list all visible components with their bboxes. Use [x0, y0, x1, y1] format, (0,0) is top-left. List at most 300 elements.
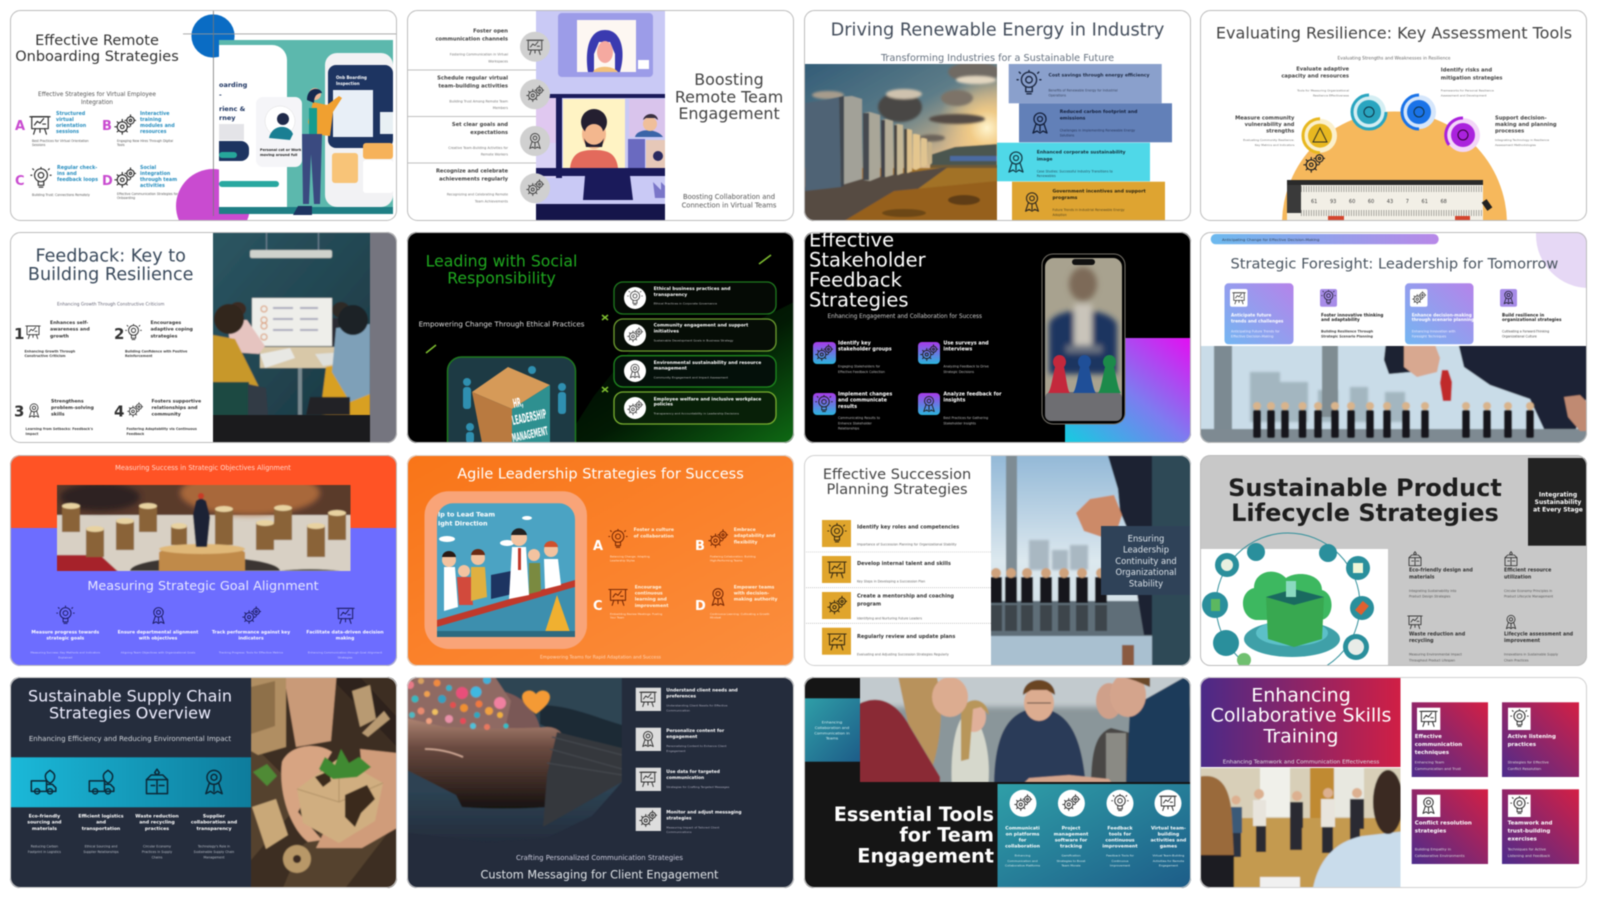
lifecycle captions: Integrating Sustainability into: [1409, 589, 1456, 593]
stakeholder headings: results: [838, 404, 857, 410]
succession captions: Evaluating and Adjusting Succession Strategies Regularly: [857, 653, 949, 657]
assessment headings: Evaluate adaptive: [1296, 67, 1349, 73]
strategy captions: Effective Communication Strategies for: [117, 192, 179, 196]
feedback captions: Learning from Setbacks: Feedback's: [26, 427, 93, 431]
feedback headings: Strengthens: [51, 398, 84, 404]
lifecycle captions: Innovations in Sustainable Supply: [1504, 653, 1558, 657]
lifecycle headings: improvement: [1504, 638, 1541, 644]
card: listening practices: practices: [1508, 742, 1537, 748]
supply chain headings: Waste reduction: [135, 814, 179, 820]
engagement headings: Schedule regular virtual: [437, 75, 508, 81]
feedback headings: Enhances self-: [50, 320, 88, 326]
step: government incentives: Adoption: [1052, 213, 1067, 217]
assessment captions: Key Metrics and Indicators: [1255, 143, 1295, 147]
subtitle: social responsibility: Empowering Change Through Ethical Practices: [419, 320, 585, 329]
agile captions: Your Team: [610, 615, 625, 619]
goal captions: Explained: [58, 655, 73, 659]
callout: leadership continuity: Organizational: [1115, 567, 1177, 577]
step: government incentives: Government incentives and support: [1052, 188, 1146, 194]
tool captions: Enhancing: [1015, 854, 1030, 858]
subtitle: engagement: Boosting Collaboration and: [683, 193, 775, 201]
illustration: recycling cloud: [1200, 533, 1388, 677]
title: social responsibility: Responsibility: [447, 268, 556, 287]
goal captions: Enhancing Communication through Goal Alignment: [308, 651, 383, 655]
icons: goal alignment: [57, 606, 354, 623]
messaging headings: preferences: [666, 694, 696, 700]
succession headings: Create a mentorship and coaching: [857, 593, 954, 599]
tool captions: Engagement: [1159, 864, 1179, 868]
engagement captions: Members: [493, 106, 508, 110]
illustration: onboarding app: [176, 10, 397, 243]
agile captions: Balancing Change: Adapting: [610, 555, 650, 559]
card: anticipate: trends and challenges: [1231, 318, 1284, 323]
tool headings: Project: [1062, 825, 1081, 831]
letters A to D: D: [695, 599, 706, 614]
supply chain headings: Eco-friendly: [29, 814, 60, 820]
letters A to D: A: [15, 119, 25, 134]
supply chain captions: Chains: [152, 855, 163, 859]
succession headings: Develop internal talent and skills: [857, 561, 951, 567]
strategy headings: Structured: [56, 111, 86, 117]
agile headings: Embrace: [734, 527, 756, 533]
card: scenario planning: Foresight Techniques: [1412, 334, 1447, 338]
panel: Sustainable Supply Chain: [10, 671, 403, 895]
engagement headings: communication channels: [435, 37, 508, 43]
title: succession: Effective Succession: [823, 467, 971, 483]
gauge: yellow: [1303, 119, 1337, 153]
title: engagement: Remote Team: [675, 87, 783, 106]
card: communication techniques: Communication and Trust: [1415, 767, 1461, 771]
supply chain captions: Ethical Sourcing and: [85, 845, 117, 849]
card: anticipate: Anticipating Future Trends for: [1231, 330, 1280, 334]
tool captions: Strategies to Boost: [1057, 859, 1086, 863]
pill: employee welfare: [614, 392, 776, 424]
tool captions: Virtual Team-Building: [1152, 854, 1184, 858]
panel: Feedback Key to Building Resilience: [10, 226, 397, 443]
picture: leadership cubes: MANAGEMENT: [511, 425, 549, 446]
messaging headings: Understand client needs and: [666, 688, 738, 694]
subtitle: messaging: Crafting Personalized Communication Strategies: [516, 854, 683, 862]
callout: leadership continuity: Continuity and: [1115, 556, 1177, 566]
title banner: Training: [1263, 725, 1338, 747]
agile headings: adaptability and: [734, 533, 775, 539]
card: conflict resolution: strategies: [1415, 829, 1447, 835]
succession captions: Identifying and Nurturing Future Leaders: [857, 617, 922, 621]
card: trust-building: Techniques for Active: [1507, 847, 1547, 851]
title: lifecycle: Lifecycle Strategies: [1231, 499, 1499, 527]
stakeholder captions: Engaging Stakeholders for: [838, 365, 881, 369]
succession headings: program: [857, 602, 881, 608]
row dividers: [804, 552, 991, 623]
pill: employee welfare: Transparency and Accountability in Leadership Decisions: [653, 411, 739, 415]
subtitle: feedback: Enhancing Growth Through Constructive Criticism: [57, 302, 164, 308]
strategy headings: activities: [140, 183, 165, 189]
callout: leadership continuity: Leadership: [1123, 545, 1169, 555]
card: trust-building: trust-building: [1508, 829, 1550, 835]
card: listening practices: [1502, 702, 1579, 777]
assessment headings: Identify risks and: [1441, 68, 1492, 74]
title: stakeholder: Effective: [809, 229, 894, 252]
goal captions: Aligning Team Objectives with Organizational Goals: [121, 651, 196, 655]
pill: ethical practices: [614, 282, 776, 314]
tool headings: on platforms: [1006, 831, 1040, 837]
goal captions: Tracking Progress: Tools for Effective Metrics: [218, 651, 284, 655]
agile headings: improvement: [635, 603, 669, 609]
feedback headings: awareness and: [50, 327, 90, 333]
strategy headings: training: [140, 117, 162, 123]
lifecycle headings: materials: [1409, 574, 1435, 580]
card: scenario planning: Enhance decision-making: [1412, 312, 1472, 317]
tool headings: Virtual team-: [1151, 825, 1186, 831]
stakeholder headings: Implement changes: [838, 392, 892, 398]
callout: integrating sustainability: Integrating: [1539, 492, 1577, 499]
goal captions: Strategies: [338, 655, 353, 659]
card: innovative thinking: Strategic Scenario Planning: [1321, 334, 1373, 338]
card: conflict resolution: Collaborative Environments: [1415, 854, 1465, 858]
agile captions: Mindset: [710, 615, 722, 619]
agile captions: Continuous Learning: Cultivating a Growth: [710, 612, 770, 616]
goal captions: Measuring Success: Key Methods and Indicators: [31, 651, 101, 655]
messaging captions: Communication: [666, 708, 690, 712]
teal icon band: [10, 757, 251, 807]
messaging captions: Strategies for Crafting Targeted Messages: [666, 785, 730, 789]
strategy captions: Sessions: [32, 143, 46, 147]
tool headings: tracking: [1060, 843, 1082, 849]
icon circles: [520, 32, 550, 203]
messaging headings: Monitor and adjust messaging: [666, 809, 742, 815]
card: innovative thinking: Building Resilience Through: [1321, 330, 1374, 334]
numbers 1 to 4: 2: [114, 325, 124, 343]
engagement headings: Set clear goals and: [452, 122, 508, 128]
subtitle: stakeholder: Enhancing Engagement and Collaboration for Success: [828, 314, 982, 320]
strategy captions: Building Trust: Connections Remotely: [32, 193, 90, 197]
photo: hand with confetti: [401, 671, 622, 842]
stakeholder captions: Communicating Results to: [838, 416, 880, 420]
gauge: blue: [1402, 95, 1436, 129]
messaging headings: engagement: [666, 734, 697, 740]
title: stakeholder: Feedback: [809, 269, 903, 292]
subtitle: resilience: Evaluating Strengths and Weaknesses in Resilience: [1338, 56, 1451, 62]
stakeholder headings: interviews: [943, 347, 972, 353]
messaging captions: Understanding Client Needs for Effective: [666, 704, 728, 708]
card: conflict resolution: Conflict resolution: [1415, 821, 1472, 827]
title: agile: Agile Leadership Strategies for Success: [457, 466, 744, 482]
photo: training circle: [1194, 762, 1406, 894]
stakeholder headings: stakeholder groups: [838, 347, 892, 353]
photo: figure on coins: [50, 471, 356, 577]
strategy headings: integration: [140, 171, 171, 177]
pill: community engagement: Community engagement and support: [654, 323, 749, 329]
numbers 1 to 4: 4: [114, 403, 124, 421]
supply chain captions: Sustainable Supply Chain: [194, 850, 234, 854]
feedback captions: Constructive Criticism: [24, 354, 66, 358]
title: resilience: Evaluating Resilience: Key Assessment Tools: [1216, 23, 1572, 42]
pill: employee welfare: policies: [654, 402, 673, 408]
stakeholder captions: Strategic Decisions: [943, 370, 974, 374]
tool headings: building: [1158, 831, 1179, 837]
title: feedback: Building Resilience: [28, 265, 193, 285]
tool headings: for: [1019, 837, 1027, 843]
supply chain headings: practices: [145, 826, 169, 832]
tool captions: Activities for Remote: [1153, 859, 1184, 863]
strategy captions: Onboarding: [117, 196, 135, 200]
agile headings: continuous: [635, 590, 663, 596]
step: corporate image: image: [1037, 156, 1053, 162]
card: innovative thinking: Foster innovative thinking: [1321, 312, 1383, 317]
panel: Custom Messaging: [401, 671, 794, 888]
title: succession: Planning Strategies: [826, 482, 968, 498]
letters A to D: B: [695, 539, 705, 554]
agile headings: of collaboration: [634, 533, 674, 539]
engagement captions: Recognizing and Celebrating Remote: [447, 193, 508, 197]
tool captions: Team Morale: [1060, 864, 1081, 868]
card: listening practices: Strategies for Effective: [1508, 760, 1550, 764]
icons: succession: [828, 524, 847, 650]
step: reduced carbon: Challenges in Implementing Renewable Energy: [1060, 129, 1135, 133]
panel: Essential Tools for Team Engagement: [804, 671, 1198, 888]
strategy headings: Regular check-: [57, 165, 97, 171]
card: communication techniques: communication: [1415, 742, 1462, 748]
step: cost savings: Benefits of Renewable Energy for Industrial: [1048, 88, 1118, 92]
icon: orange heart: [522, 690, 550, 714]
subtitle: onboarding: Effective Strategies for Virtual Employee: [38, 92, 156, 98]
photo: hands holding kraft box: [245, 671, 403, 895]
goal headings: making: [336, 635, 354, 641]
card: scenario planning: [1405, 283, 1474, 344]
feedback captions: Reinforcement: [125, 354, 153, 358]
goal headings: strategic goals: [46, 635, 85, 641]
card: trust-building: [1502, 789, 1579, 864]
supply chain headings: materials: [32, 826, 57, 832]
stakeholder captions: Effective Feedback Collection: [838, 370, 885, 374]
step: corporate image: Renewables: [1037, 174, 1056, 178]
assessment headings: processes: [1495, 129, 1524, 135]
icons: feedback: [26, 324, 143, 417]
panel: Sustainable Product Lifecycle: [1200, 455, 1587, 677]
icons: messaging boxes: [636, 688, 661, 831]
card: conflict resolution: [1412, 789, 1488, 864]
step: government incentives: programs: [1052, 195, 1078, 201]
supply chain captions: Practices in Supply: [142, 850, 172, 854]
succession captions: Importance of Succession Planning for Organizational Stability: [857, 543, 957, 547]
agile headings: flexibility: [734, 539, 758, 545]
assessment captions: Integrating Technology in Resilience: [1495, 138, 1549, 142]
feedback captions: Enhancing Growth Through: [24, 349, 76, 353]
agile captions: Embedding Review Meetings: Fueling: [610, 612, 662, 616]
card: build resilience: organizational strategies: [1502, 317, 1562, 322]
lifecycle captions: Product Lifecycle Management: [1504, 594, 1554, 598]
agile headings: Empower teams: [734, 584, 775, 590]
supply chain headings: Supplier: [203, 814, 226, 820]
strategy headings: sessions: [56, 129, 79, 135]
framed illustration: team climbing: [424, 491, 587, 649]
agile captions: Leadership Styles: [610, 558, 635, 562]
supply chain headings: sourcing and: [27, 820, 62, 826]
engagement captions: Building Trust Among Remote Team: [449, 99, 508, 103]
assessment captions: Resilience Effectiveness: [1313, 94, 1349, 98]
icons: onboarding: [30, 115, 136, 187]
card: innovative thinking: and adaptability: [1321, 317, 1360, 322]
icons: engagement: [527, 40, 544, 196]
semicircle with ruler: [1282, 110, 1508, 221]
card: anticipate: [1224, 283, 1294, 344]
supply chain captions: Management: [204, 855, 225, 859]
title: engagement: Engagement: [678, 104, 780, 123]
title: lifecycle: Sustainable Product: [1228, 474, 1502, 502]
title: foresight: Strategic Foresight: Leadership for Tomorrow: [1230, 255, 1558, 272]
supply chain captions: Technology's Role in: [197, 845, 230, 849]
panel: Measuring Strategic Goal Alignment: [10, 455, 397, 666]
supply chain headings: transparency: [196, 826, 232, 832]
agile captions: Fostering Collaboration: Building: [710, 555, 756, 559]
strategy headings: resources: [140, 129, 167, 135]
pill: ethical practices: Ethical business practices and: [654, 286, 730, 292]
supply chain headings: collaboration and: [191, 820, 237, 826]
tool headings: games: [1160, 844, 1177, 849]
agile headings: with decision-: [734, 590, 769, 596]
card: trust-building: Listening and Feedback: [1508, 854, 1551, 858]
goal headings: Ensure departmental alignment: [118, 630, 199, 636]
agile headings: Encourage: [635, 584, 661, 590]
picture: leadership cubes: LEADERSHIP: [511, 407, 548, 429]
illustration: onboarding app: oarding: [219, 81, 248, 89]
panel: Effective Succession Planning: [804, 449, 1198, 673]
title banner: Collaborative Skills: [1211, 705, 1391, 727]
title: stakeholder: Stakeholder: [809, 249, 927, 272]
callout: integrating sustainability: [1528, 458, 1587, 546]
supply chain headings: transportation: [82, 826, 120, 832]
step: reduced carbon: emissions: [1060, 116, 1086, 122]
panel: Effective Remote Onboarding Strategies: [10, 10, 397, 243]
card: communication techniques: Enhancing Team: [1415, 760, 1445, 764]
step: cost savings: Operations: [1048, 93, 1066, 97]
messaging headings: communication: [666, 775, 704, 781]
feedback headings: skills: [51, 412, 65, 418]
tool captions: Gamification: [1061, 854, 1081, 858]
pill: environmental sustainability: Environmental sustainability and resource: [654, 360, 761, 366]
teal tagline block: [804, 698, 860, 762]
card: communication techniques: [1412, 702, 1488, 777]
photo: team around table: [854, 671, 1198, 788]
pill: environmental sustainability: Community Engagement and Impact Assessment: [654, 375, 729, 379]
succession headings: Identify key roles and competencies: [857, 524, 959, 530]
subtitle: engagement: Connection in Virtual Teams: [682, 201, 777, 209]
pill: environmental sustainability: management: [654, 366, 688, 372]
teal tagline block: Collaboration and: [815, 725, 850, 730]
feedback captions: Feedback: [126, 432, 145, 436]
card: listening practices: Conflict Resolution: [1508, 767, 1541, 771]
supply chain captions: Circular Economy: [143, 845, 171, 849]
title banner: [1200, 677, 1400, 767]
step: cost savings: [1009, 64, 1162, 103]
engagement captions: Creative Team-Building Activities for: [448, 146, 509, 150]
card: anticipate: Effective Decision-Making: [1231, 334, 1274, 338]
illustration: onboarding app: Personal cot or Work: [260, 148, 302, 152]
strategy captions: Best Practices for Virtual Orientation: [32, 139, 89, 143]
row dividers: [407, 70, 536, 164]
messaging captions: Measuring Impact of Tailored Client: [666, 825, 720, 829]
feedback captions: Impact: [26, 432, 39, 436]
lifecycle captions: Measuring Environmental Impact: [1409, 653, 1463, 657]
card: build resilience: Organizational Culture: [1502, 334, 1537, 338]
assessment captions: Assessment Methodologies: [1495, 143, 1536, 147]
panel: Driving Renewable Energy in Industry: [798, 10, 1191, 228]
engagement headings: team-building activities: [438, 83, 508, 89]
stakeholder headings: Use surveys and: [943, 340, 989, 346]
teal tagline block: Enhancing: [822, 720, 843, 725]
goal headings: Measure progress towards: [31, 630, 100, 636]
agile headings: learning and: [635, 597, 667, 603]
card: communication techniques: techniques: [1415, 750, 1450, 756]
card: scenario planning: through scenario planning: [1412, 317, 1474, 322]
picture: leadership cubes: [448, 357, 576, 446]
subtitle: supply chain: Enhancing Efficiency and Reducing Environmental Impact: [29, 735, 231, 743]
feedback headings: problem-solving: [51, 405, 94, 411]
teal tagline block: Teams: [825, 735, 838, 740]
feedback headings: Encourages: [150, 320, 181, 326]
illustration: onboarding app: rney: [219, 114, 236, 122]
strategy headings: Social: [140, 165, 156, 171]
stakeholder headings: and communicate: [838, 398, 888, 404]
pill: ethical practices: Ethical Practices in Corporate Governance: [654, 301, 717, 305]
assessment headings: strengths: [1266, 129, 1294, 135]
illustration: onboarding app: -: [219, 91, 222, 99]
feedback captions: Building Confidence with Positive: [125, 349, 188, 353]
title: supply chain: Strategies Overview: [49, 703, 211, 722]
title: stakeholder: Strategies: [809, 289, 909, 312]
letters A to D: C: [593, 599, 603, 614]
top tagline: Measuring Success in Strategic Objectives Alignment: [115, 464, 291, 472]
tool headings: improvement: [1102, 843, 1138, 849]
subtitle: renewable energy: Transforming Industries for a Sustainable Future: [880, 53, 1114, 64]
step: corporate image: Case Studies: Successful Industry Transitions to: [1037, 169, 1113, 173]
title banner: Enhancing Teamwork and Communication Effectiveness: [1223, 759, 1379, 765]
pill: community engagement: [614, 319, 776, 351]
callout: integrating sustainability: Sustainability: [1535, 499, 1581, 506]
numbers 1 to 4: 3: [14, 403, 24, 421]
tool headings: software for: [1055, 837, 1088, 843]
step: corporate image: Enhanced corporate sustainability: [1037, 150, 1126, 156]
strategy headings: Interactive: [140, 111, 170, 117]
strategy captions: Engaging New Hires Through Digital: [117, 139, 173, 143]
gauge: purple: [1446, 118, 1480, 152]
illustration: video call: [536, 10, 665, 221]
title: team engagement: Essential Tools: [834, 803, 994, 826]
pill: employee welfare: Employee welfare and inclusive workplace: [654, 396, 761, 402]
card: listening practices: Active listening: [1508, 734, 1556, 740]
stakeholder captions: Analyzing Feedback to Drive: [943, 365, 989, 369]
step: reduced carbon: Solutions: [1060, 133, 1075, 137]
assessment captions: Frameworks for Personal Resilience: [1441, 89, 1494, 93]
tool captions: Collaborative Platforms: [1005, 864, 1040, 868]
engagement headings: expectations: [470, 130, 508, 136]
messaging captions: Engagement: [666, 749, 686, 753]
panel: Enhancing Collaborative Skills Training: [1194, 677, 1587, 894]
stakeholder captions: Best Practices for Gathering: [943, 416, 988, 420]
card: trust-building: Teamwork and: [1508, 821, 1553, 827]
stakeholder headings: insights: [943, 398, 965, 404]
tool headings: tools for: [1109, 831, 1132, 837]
lifecycle headings: Efficient resource: [1504, 568, 1552, 574]
teal tagline block: Communication in: [814, 730, 850, 735]
tool headings: Communicati: [1005, 825, 1040, 831]
title: feedback: Feedback: Key to: [35, 247, 186, 267]
illustration: onboarding app: Onb Boarding: [336, 75, 367, 80]
step: reduced carbon: Reduced carbon footprint and: [1060, 109, 1137, 115]
goal headings: Facilitate data-driven decision: [306, 630, 384, 636]
panel: Boosting Remote Team Engagement: [407, 10, 794, 221]
feedback headings: relationships and: [152, 405, 198, 411]
